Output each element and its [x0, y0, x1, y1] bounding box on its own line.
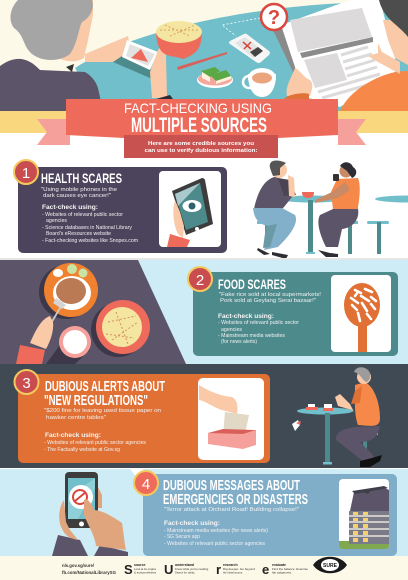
chopsticks — [177, 52, 227, 70]
badge 4 — [134, 471, 158, 495]
woman left — [253, 161, 296, 259]
title text — [124, 100, 272, 137]
hand and sleeve — [150, 46, 167, 98]
card: spoon of rice — [331, 275, 391, 352]
text 1: Fact-check using: — [42, 204, 98, 211]
text 1: - Fact-checking websites like Snopes.com — [42, 238, 138, 244]
phone with warning — [113, 40, 158, 78]
text 4: - SG Secure app — [164, 534, 200, 540]
question mark icon: ? — [268, 7, 280, 29]
text 4 — [164, 507, 299, 547]
text 2: agencies — [221, 327, 243, 333]
header illustration — [0, 0, 408, 133]
badge 2 — [188, 267, 212, 291]
S.U.R.E. steps: U — [164, 562, 173, 577]
title text: FACT-CHECKING USING — [124, 100, 272, 116]
text 2: Pork sold at Geylang Serai bazaar!" — [220, 298, 316, 304]
heading 3 — [44, 378, 165, 409]
illustration: hand holding phone — [52, 472, 128, 556]
badge 2: 2 — [196, 272, 204, 289]
person left — [0, 0, 130, 111]
heading 1: HEALTH SCARES — [41, 170, 122, 186]
phone with cross — [229, 34, 270, 63]
text 3: hawker centre tables" — [46, 415, 106, 421]
illustration: two women at table — [253, 161, 408, 259]
text 4: "Terror attack at Orchard Road! Building collapse!" — [164, 507, 299, 513]
text 1 — [41, 187, 138, 244]
text 2: - Mainstream media websites — [218, 333, 286, 339]
heading 4 — [163, 477, 308, 508]
S.U.R.E. steps: S — [124, 562, 133, 577]
S.U.R.E. steps: Know what you're reading. — [175, 567, 209, 571]
text 3: "$200 fine for leaving used tissue paper on — [44, 408, 161, 414]
footer links: nls.gov.sg/sure/ — [62, 563, 95, 568]
kueh plate — [197, 67, 233, 88]
hand with fork and glass — [16, 298, 91, 364]
section 3 background — [0, 364, 408, 468]
text 1: dark causes eye cancer!" — [43, 193, 111, 199]
panel 4: dubious messages — [134, 471, 397, 556]
noodle bowl — [156, 21, 202, 59]
badge 4: 4 — [142, 476, 150, 493]
S.U.R.E. steps: Dig deeper. Go beyond — [223, 567, 255, 571]
card: tissue box — [198, 378, 264, 460]
badge 1: 1 — [22, 165, 30, 182]
text 3: Fact-check using: — [45, 432, 101, 439]
S.U.R.E. steps: & trustworthiness — [134, 570, 157, 574]
heading 3: "NEW REGULATIONS" — [44, 392, 148, 409]
text 2 — [218, 292, 321, 345]
text 2: Fact-check using: — [218, 313, 274, 320]
panel 2: food scares — [188, 267, 398, 356]
text 4: Fact-check using: — [164, 520, 220, 527]
table top — [75, 0, 408, 111]
text 4: - Websites of relevant public sector agencies — [164, 541, 266, 547]
S.U.R.E. steps — [124, 562, 308, 577]
card: collapsed building — [339, 479, 389, 549]
text 4: - Mainstream media websites (for news alerts) — [164, 528, 268, 534]
S.U.R.E. steps: Find the balance. Exercise — [272, 567, 308, 571]
text 3: - Websites of relevant public sector agencies — [44, 440, 147, 446]
S.U.R.E. steps: evaluate — [272, 563, 286, 567]
text 3: - The Factually website at Gov.sg — [44, 447, 120, 453]
heading 2: FOOD SCARES — [218, 276, 286, 292]
newspaper — [273, 0, 398, 107]
badge 3: 3 — [22, 375, 31, 392]
S.U.R.E. steps: understand — [175, 563, 194, 567]
person right with hands — [284, 0, 408, 111]
title text: MULTIPLE SOURCES — [131, 114, 267, 137]
woman right — [315, 162, 360, 257]
panel 1: health scares — [14, 160, 227, 253]
badge 3 — [14, 370, 38, 394]
title ribbon — [37, 99, 366, 158]
text 1: agencies — [46, 218, 68, 224]
S.U.R.E. steps: fair judgement. — [272, 570, 292, 574]
intro text: can use to verify dubious information: — [144, 148, 258, 154]
heading 4: EMERGENCIES OR DISASTERS — [163, 491, 308, 508]
text 2: - Websites of relevant public sector — [218, 320, 299, 326]
S.U.R.E. steps: r — [216, 562, 221, 577]
S.U.R.E. steps: Look at its origins — [134, 567, 157, 571]
intro text — [144, 141, 258, 154]
heading 4: DUBIOUS MESSAGES ABOUT — [163, 477, 300, 494]
section 4 background — [0, 469, 408, 556]
S.U.R.E. steps: e — [262, 562, 269, 577]
footer links: fb.com/NationalLibrarySG — [62, 570, 116, 575]
text 1: "Using mobile phones in the — [41, 187, 117, 193]
S.U.R.E. steps: source — [134, 563, 146, 567]
dashed connector — [222, 18, 260, 36]
text 1: - Science databases in National Library — [42, 225, 133, 231]
badge 1 — [14, 160, 38, 184]
S.U.R.E. steps: Search for clarity. — [175, 570, 195, 574]
S.U.R.E. steps: the initial source. — [223, 570, 243, 574]
intro text: Here are some credible sources you — [148, 141, 254, 147]
text 1: Board's eResources website — [46, 231, 111, 237]
tea cup — [243, 68, 276, 97]
text 2: "Fake rice sold at local supermarkets! — [219, 292, 321, 298]
question mark icon — [261, 4, 287, 30]
text 2: (for news alerts) — [221, 339, 257, 345]
panel 3: dubious alerts — [14, 370, 270, 463]
SURE logo — [313, 557, 347, 573]
heading 3: DUBIOUS ALERTS ABOUT — [45, 378, 165, 395]
noodle plate — [91, 300, 150, 357]
illustration: man at table — [292, 367, 382, 467]
text 3 — [44, 408, 161, 453]
SURE logo: SURE — [323, 563, 338, 569]
text 1: - Websites of relevant public sector — [42, 212, 123, 218]
section 2 background — [0, 258, 408, 364]
plate of curry rice — [39, 263, 98, 319]
S.U.R.E. steps: research — [223, 563, 238, 567]
card: phone with eye — [159, 171, 221, 247]
footer links — [62, 563, 116, 575]
footer — [0, 556, 408, 580]
